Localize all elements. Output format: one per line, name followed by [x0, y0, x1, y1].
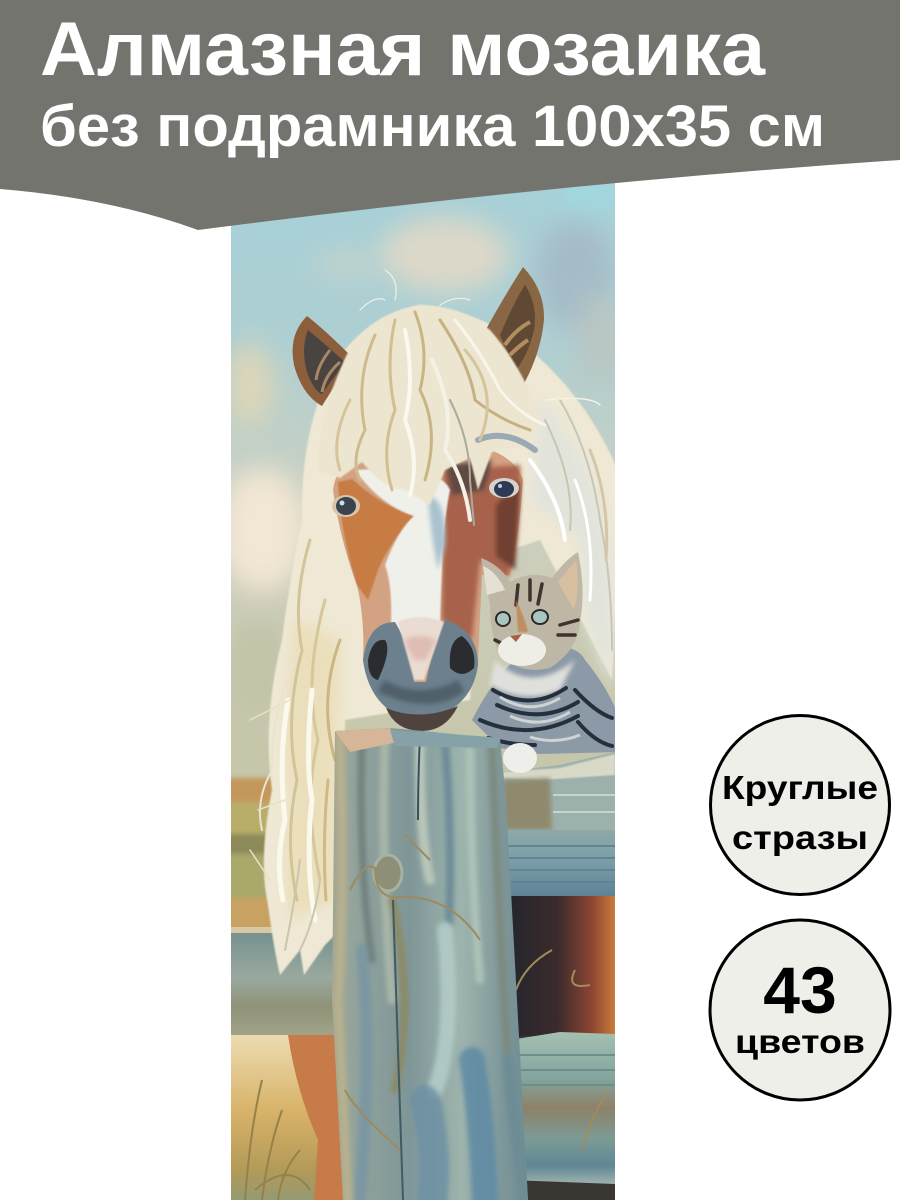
- dry stems across post: [345, 835, 480, 1150]
- white blaze: [355, 469, 450, 640]
- badge: round rhinestones: Круглые: [722, 769, 878, 806]
- nostrils: [368, 636, 474, 680]
- horse leg: [288, 1035, 346, 1200]
- horse face: [332, 440, 523, 731]
- title: Алмазная мозаика: [40, 7, 766, 92]
- orange cheek patch: [338, 479, 414, 600]
- badge: 43 colours: цветов: [735, 1023, 865, 1060]
- painting: horse and kitten at a fence: [218, 170, 624, 1200]
- subtitle: без подрамника 100х35 см: [40, 94, 825, 159]
- kitten paw: [503, 743, 537, 773]
- post cap: [335, 728, 398, 752]
- header banner: [0, 0, 900, 230]
- wood knot: [374, 855, 402, 891]
- muzzle: [363, 620, 478, 722]
- badge: round rhinestones: стразы: [732, 819, 868, 856]
- grass stalks on gap: [516, 950, 605, 1150]
- badge: 43 colours: 43: [763, 953, 837, 1027]
- mane behind the head: [264, 305, 622, 975]
- dark backing behind lower fence: [519, 1036, 615, 1200]
- kitten head: [481, 552, 583, 670]
- wooden post: [325, 725, 535, 1200]
- kitten body: [472, 647, 622, 754]
- kitten eyes: [496, 610, 548, 626]
- upper right fence rail: [500, 752, 615, 897]
- grass blades: [245, 1080, 310, 1200]
- right eye: [489, 478, 519, 498]
- kitten muzzle: [498, 634, 546, 666]
- clouds: [231, 188, 615, 690]
- wood grain: [338, 735, 525, 1200]
- dark gap between rails: [500, 896, 615, 1036]
- distant field bands: [231, 775, 273, 927]
- brown right side of face: [442, 465, 520, 640]
- lower right fence rail: [510, 1032, 615, 1184]
- kitten: [472, 552, 622, 754]
- left fence rail: [231, 927, 341, 1036]
- forelock: [318, 270, 545, 525]
- badge: round rhinestones: [710, 716, 890, 894]
- mane strands left and right: [250, 398, 612, 950]
- grass at lower left: [231, 1035, 318, 1200]
- sky background: [231, 183, 615, 781]
- left eye: [332, 495, 360, 517]
- badge: 43 colours: [710, 920, 890, 1100]
- left ear: [293, 316, 353, 406]
- right ear: [486, 267, 544, 383]
